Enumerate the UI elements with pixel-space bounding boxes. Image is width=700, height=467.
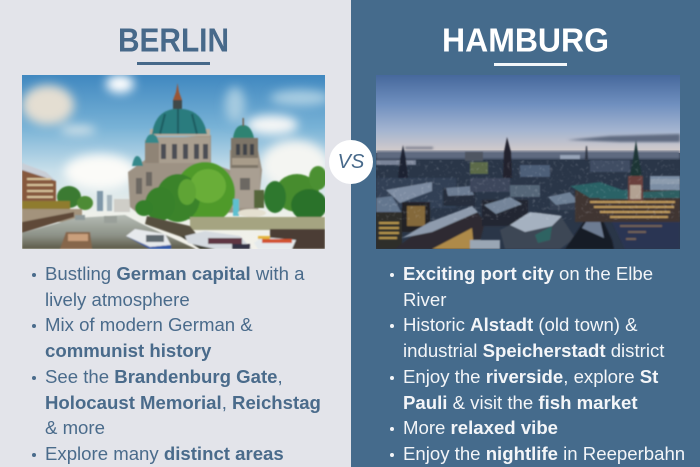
bullet list: Hamburg: River xyxy=(403,289,446,310)
bullet list: Berlin: Explore many distinct areas xyxy=(45,443,284,464)
town hall xyxy=(575,190,680,222)
bullet list: Hamburg: Enjoy the riverside, explore St xyxy=(403,366,658,387)
right tower xyxy=(231,138,258,200)
panel: Berlin xyxy=(0,0,351,467)
bullet list: Berlin: See the Brandenburg Gate, xyxy=(45,366,283,387)
bullet list: Berlin: & more xyxy=(45,417,105,438)
distant city xyxy=(376,160,416,165)
main dome xyxy=(152,109,207,134)
bullet list: Hamburg: Pauli & visit the fish market xyxy=(403,392,638,413)
church spires xyxy=(398,145,408,178)
heading: Berlin: BERLIN xyxy=(118,22,229,58)
heading: Hamburg: HAMBURG xyxy=(442,22,609,58)
photo: Berlin Cathedral on the Spree xyxy=(22,75,325,249)
photo: Hamburg skyline at dusk xyxy=(376,75,680,249)
water xyxy=(22,215,196,249)
heading underline xyxy=(494,63,567,66)
bullet list: Hamburg: Historic Alstadt (old town) & xyxy=(403,314,638,335)
left building xyxy=(22,163,56,205)
bullet list: Hamburg: Exciting port city on the Elbe xyxy=(403,263,653,284)
heading underline xyxy=(137,62,210,65)
bullet list: Hamburg: industrial Speicherstadt district xyxy=(403,340,664,361)
city lights and snow speckle xyxy=(376,160,680,220)
bullet list: Hamburg: More relaxed vibe xyxy=(403,417,558,438)
bullet list: Berlin: communist history xyxy=(45,340,211,361)
small domes xyxy=(145,134,159,143)
embankment xyxy=(190,217,325,230)
badge: VS xyxy=(329,140,373,184)
boats xyxy=(60,232,92,249)
right trees xyxy=(275,174,319,212)
bullet list: Hamburg xyxy=(390,263,685,464)
badge: VS: VS xyxy=(338,151,364,173)
far towers xyxy=(114,199,130,212)
bullet list: Hamburg: Enjoy the nightlife in Reeperbahn xyxy=(403,443,685,464)
central trees xyxy=(175,162,235,224)
bullet list: Berlin: lively atmosphere xyxy=(45,289,190,310)
bullet list: Berlin: Bustling German capital with a xyxy=(45,263,304,284)
bullet list: Berlin: Mix of modern German & xyxy=(45,314,253,335)
blocks with snow xyxy=(376,178,456,208)
panel: Hamburg xyxy=(351,0,700,467)
cathedral body xyxy=(128,135,262,215)
bullet list: Berlin xyxy=(32,263,321,464)
water xyxy=(612,222,680,249)
bullet list: Berlin: Holocaust Memorial, Reichstag xyxy=(45,392,321,413)
